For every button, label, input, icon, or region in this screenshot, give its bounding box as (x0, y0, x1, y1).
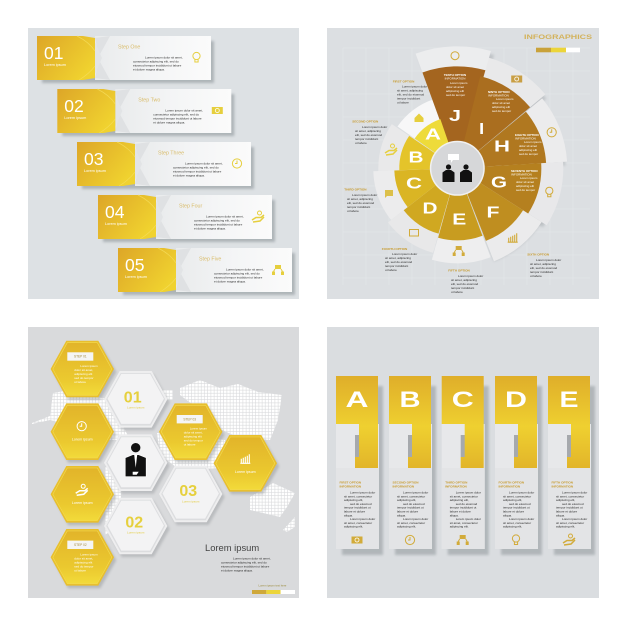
column E: Lorem ipsum dolor (562, 517, 587, 521)
column B: Lorem ipsum dolor (403, 490, 428, 494)
step card 04: 04 (105, 202, 125, 222)
sector letters: E (452, 212, 466, 228)
sector letters: H (494, 138, 510, 156)
sector captions: INFORMATION (488, 94, 509, 98)
outside captions: FOURTH OPTION (382, 247, 408, 251)
column E: E (560, 387, 578, 412)
hexagon: step 03: dolor sit amet, (184, 431, 203, 435)
sector captions: Lorem ipsum (450, 81, 468, 85)
outside captions: tempor incididunt (397, 96, 420, 100)
step card 05: eiusmod tempor incididunt ut labore (214, 276, 263, 280)
column D: sed do eiusmod (509, 502, 531, 506)
step card 03: Lorem ipsum (84, 169, 106, 173)
column A: tempor incididunt ut (344, 506, 371, 510)
column C: sed do eiusmod (456, 502, 478, 506)
column A (336, 376, 383, 555)
hexagon: 02 (104, 498, 170, 557)
outside captions: ut labore (530, 274, 542, 278)
outside captions: sit amet, adipiscing (347, 197, 373, 201)
column C: adipiscing elit, (450, 498, 469, 502)
sector letters: J (449, 108, 461, 125)
column A: Lorem ipsum dolor (350, 490, 375, 494)
outside captions: SECOND OPTION (352, 120, 379, 124)
column D: adipiscing elit, (503, 498, 522, 502)
column C: aliqua. (450, 513, 459, 517)
step card 04: consectetur adipiscing elit, sed do (194, 219, 240, 223)
sector captions: sed do tempor (519, 152, 538, 156)
outside captions: elit, sed do eiusmod (385, 260, 412, 264)
outside captions: sit amet, adipiscing (397, 88, 423, 92)
sector captions (444, 73, 542, 192)
column E: sit amet, consectetur (556, 521, 584, 525)
hexagon: step 01: sed do tempor (74, 376, 93, 380)
sector captions: EIGHTH OPTION (515, 133, 539, 137)
sector captions: sed do tempor (492, 109, 511, 113)
step card 05 (118, 248, 295, 295)
outside captions: elit, sed do eiusmod (451, 282, 478, 286)
step card 05: et dolore magna aliqua. (214, 280, 246, 284)
column C: tempor incididunt ut (450, 506, 476, 510)
step card 04: et dolore magna aliqua. (194, 227, 226, 231)
column D (495, 376, 542, 555)
dotted world map (32, 380, 295, 535)
column E: sed do eiusmod (562, 502, 584, 506)
step card 01: et dolore magna aliqua. (133, 68, 165, 72)
hexagon: step 03: STEP 03 (183, 417, 196, 421)
sector captions: NINTH OPTION (488, 90, 510, 94)
column E: aliqua. (556, 513, 565, 517)
panel: numbered steps (28, 28, 299, 299)
hexagon: step 03 (159, 403, 225, 463)
column D: aliqua. (503, 513, 512, 517)
column D: INFORMATION (498, 484, 521, 488)
step card 01: Lorem ipsum dolor sit amet, (145, 56, 183, 60)
hexagon: 02: 02 (125, 515, 143, 532)
outside captions: elit, sed do eiusmod (530, 266, 557, 270)
outside captions: ut labore (347, 209, 359, 213)
outside captions: ut labore (385, 268, 397, 272)
sector icons (385, 52, 556, 256)
column E: INFORMATION (552, 484, 574, 488)
column E: labore et dolore (556, 510, 577, 514)
hexagon: step 02: Lorem ipsum (80, 552, 98, 556)
step card 01: Step One (118, 44, 140, 50)
outside captions: sit amet, adipiscing (355, 129, 381, 133)
column D: Lorem ipsum dolor (509, 490, 534, 494)
column B: INFORMATION (392, 484, 415, 488)
hexagon: step 01: dolor sit amet, (74, 368, 93, 372)
column B (389, 376, 436, 555)
step card 01: eiusmod tempor incididunt ut labore (133, 64, 182, 68)
hexagon: step 02: STEP 02 (74, 543, 87, 547)
step card 04: Lorem ipsum dolor sit amet, (206, 215, 244, 219)
centre circle with two people (430, 141, 485, 196)
column E (548, 376, 595, 555)
outside captions: elit, sed do eiusmod (397, 92, 424, 96)
hexagon: step 02: dolor sit amet, (74, 556, 93, 560)
outside captions: tempor incididunt (451, 286, 474, 290)
outside captions: FIRST OPTION (393, 80, 415, 84)
hexagon: step 01: STEP 01 (74, 355, 87, 359)
column A: adipiscing elit. (344, 525, 363, 529)
outside captions: ut labore (355, 141, 367, 145)
outside captions: Lorem ipsum dolor (402, 84, 427, 88)
sector captions: Lorem ipsum (496, 97, 514, 101)
step card 04: eiusmod tempor incididunt ut labore (194, 223, 243, 227)
sector letters: F (486, 204, 500, 222)
column C: sit amet, consectetur (450, 494, 478, 498)
step card 02: eiusmod tempor incididunt ut labore (153, 117, 202, 121)
legend bar: Lorem ipsum text here (258, 584, 287, 588)
column A: FIRST OPTION (340, 480, 362, 484)
sector captions: TENTH OPTION (444, 73, 466, 77)
column E: Lorem ipsum dolor (562, 490, 587, 494)
step card 05: Lorem ipsum dolor sit amet, (226, 268, 264, 272)
heading: infographics: INFOGRAPHICS (524, 34, 592, 41)
step card 05: consectetur adipiscing elit, sed do (214, 272, 260, 276)
outside captions: elit, sed do eiusmod (347, 201, 374, 205)
step card 04 (98, 195, 275, 242)
column C: adipiscing elit. (450, 525, 469, 529)
column B: sed do eiusmod (403, 502, 425, 506)
hexagon: 03: Lorem ipsum (182, 500, 200, 504)
panel: A to E columns (327, 327, 599, 598)
sector captions: dolor sit amet (446, 85, 464, 89)
hexagon: 03: 03 (179, 483, 197, 500)
hexagon: clock: Lorem ipsum (72, 438, 93, 442)
hexagon: chart: Lorem ipsum (235, 470, 256, 474)
hexagon: 02: Lorem ipsum (127, 530, 145, 534)
step card 01: consectetur adipiscing elit, sed do (133, 60, 179, 64)
outside captions: sit amet, adipiscing (385, 256, 411, 260)
step card 03: Step Three (158, 150, 184, 156)
step card 02: 02 (64, 96, 84, 116)
hexagon: step 03: ut labore (184, 443, 196, 447)
sector letters: C (406, 176, 422, 192)
hexagon: clock (51, 403, 116, 463)
outside captions: Lorem ipsum dolor (362, 125, 387, 129)
outside captions: sit amet, adipiscing (451, 278, 477, 282)
outside captions: Lorem ipsum dolor (536, 258, 561, 262)
step card 02 (57, 89, 234, 136)
step card 04: Step Four (179, 204, 202, 210)
sector captions: INFORMATION (445, 76, 465, 80)
outside captions: tempor incididunt (347, 205, 370, 209)
hexagon: step 03: sed do tempor (184, 439, 203, 443)
sector captions: Lorem ipsum (524, 140, 542, 144)
hexagon: 01 (104, 371, 170, 430)
hexagon: step 03: Lorem ipsum (190, 427, 208, 431)
column B: Lorem ipsum dolor (403, 517, 428, 521)
column A: adipiscing elit, (344, 498, 363, 502)
column D: Lorem ipsum dolor (509, 517, 534, 521)
heading: infographics (524, 34, 592, 52)
sector captions: Lorem ipsum (520, 176, 538, 180)
hexagon: hand: Lorem ipsum (72, 501, 93, 505)
outside captions: tempor incididunt (530, 270, 553, 274)
column A: Lorem ipsum dolor (350, 517, 375, 521)
step card 03: et dolore magna aliqua. (173, 174, 205, 178)
sector captions: sed do tempor (446, 93, 465, 97)
column B: sit amet, consectetur (397, 494, 425, 498)
column A: A (346, 387, 369, 412)
step card 02: Step Two (138, 98, 160, 104)
sector captions: dolor sit amet (492, 101, 510, 105)
sector letters: A (425, 126, 441, 144)
step card 03: consectetur adipiscing elit, sed do (173, 166, 219, 170)
step card 05: Lorem ipsum (125, 275, 147, 279)
wheel chart (369, 45, 572, 265)
hexagon: step 01: Lorem ipsum (80, 364, 98, 368)
text block: lorem ipsum: Lorem ipsum dolor sit amet, (233, 556, 271, 560)
column B: labore et dolore (397, 510, 418, 514)
outside captions: ut labore (451, 290, 463, 294)
hexagon: person (104, 434, 170, 494)
outside captions: ut labore (397, 100, 409, 104)
panel: circular wheel (327, 28, 599, 299)
text block: lorem ipsum: consectetur adipiscing elit, sed do (221, 560, 267, 564)
text block: lorem ipsum: Lorem ipsum (205, 542, 259, 553)
column B: SECOND OPTION (392, 480, 419, 484)
step card 02: Lorem ipsum dolor sit amet, (165, 109, 203, 113)
column C: INFORMATION (445, 484, 468, 488)
outside captions (344, 80, 561, 294)
column C: C (452, 387, 474, 412)
sector captions: INFORMATION (515, 136, 536, 140)
sector captions: adipiscing elit (492, 105, 510, 109)
step card 04: Lorem ipsum (105, 222, 127, 226)
hexagon: step 03: adipiscing elit (184, 435, 202, 439)
column D: D (505, 387, 527, 412)
outer white band (369, 45, 572, 265)
column E: FIFTH OPTION (552, 480, 574, 484)
outside captions: THIRD OPTION (344, 188, 367, 192)
outside captions: tempor incididunt (385, 264, 408, 268)
step card 02: Lorem ipsum (64, 116, 86, 120)
step card 01: Lorem ipsum (44, 63, 66, 67)
hexagon: step 01: adipiscing elit (74, 372, 92, 376)
column B: adipiscing elit. (397, 525, 416, 529)
hexagon: step 02: sed do tempor (74, 564, 93, 568)
sector captions: adipiscing elit (516, 184, 534, 188)
sector letters: B (408, 150, 424, 166)
hexagon: hand (51, 466, 116, 525)
column D: tempor incididunt ut (503, 506, 530, 510)
column D: FOURTH OPTION (498, 480, 525, 484)
sector captions: sed do tempor (516, 188, 535, 192)
column D: sit amet, consectetur (503, 521, 531, 525)
sector captions: adipiscing elit (519, 148, 537, 152)
legend bar (252, 584, 295, 594)
sector letters: G (491, 174, 507, 192)
outside captions: tempor incididunt (355, 137, 378, 141)
step card 03: eiusmod tempor incididunt ut labore (173, 170, 222, 174)
column C (442, 376, 489, 555)
column E: adipiscing elit, (556, 498, 575, 502)
hexagon: 01: 01 (124, 390, 142, 407)
sector captions: SEVENTH OPTION (511, 169, 538, 173)
step card 01 (37, 36, 214, 83)
column C: THIRD OPTION (445, 480, 468, 484)
column C: Lorem ipsum dolor (456, 517, 481, 521)
sector captions: adipiscing elit (446, 89, 464, 93)
column C: sit amet, consectetur (450, 521, 478, 525)
hexagon: step 02 (51, 529, 116, 588)
sector letters (406, 108, 510, 228)
outside captions: Lorem ipsum dolor (392, 252, 417, 256)
column B: B (400, 387, 420, 412)
hexagon: step 01 (51, 341, 116, 400)
outside captions: Lorem ipsum dolor (352, 193, 377, 197)
hexagon: step 02: ut labore (74, 568, 86, 572)
step card 03 (77, 142, 254, 189)
step card 05: 05 (125, 255, 144, 275)
column A: sit amet, consectetur (344, 521, 372, 525)
column E: tempor incididunt ut (556, 506, 583, 510)
hexagon: 01: Lorem ipsum (127, 405, 145, 409)
outside captions: Lorem ipsum dolor (458, 274, 483, 278)
column D: sit amet, consectetur (503, 494, 531, 498)
column E: sit amet, consectetur (556, 494, 584, 498)
panel: hexagons (28, 327, 299, 598)
step card 05: Step Five (199, 256, 221, 262)
column D: labore et dolore (503, 510, 524, 514)
column C: labore et dolore (450, 510, 471, 514)
sector captions: dolor sit amet (519, 144, 537, 148)
text block: lorem ipsum: eiusmod tempor incididunt ut labore (221, 564, 270, 568)
column A: INFORMATION (340, 484, 362, 488)
hexagon: 03 (159, 466, 225, 525)
column A: aliqua. (344, 513, 353, 517)
column B: tempor incididunt ut (397, 506, 424, 510)
text block: lorem ipsum: et dolore magna aliqua. (221, 568, 253, 572)
sector letters: D (422, 200, 438, 218)
sector captions: dolor sit amet (516, 180, 534, 184)
step card 02: consectetur adipiscing elit, sed do (153, 113, 199, 117)
step card 01: 01 (44, 43, 63, 63)
column D: adipiscing elit. (503, 525, 522, 529)
hexagon: chart (214, 435, 279, 494)
column E: adipiscing elit. (556, 525, 575, 529)
hexagon: step 01: ut labore (74, 380, 86, 384)
column B: sit amet, consectetur (397, 521, 425, 525)
text block: lorem ipsum (205, 542, 271, 572)
step card 03: Lorem ipsum dolor sit amet, (185, 162, 223, 166)
outside captions: FIFTH OPTION (448, 268, 471, 272)
sector letters: I (479, 121, 484, 138)
step card 03: 03 (84, 149, 103, 169)
hexagon: step 02: adipiscing elit (74, 560, 92, 564)
outside captions: elit, sed do eiusmod (355, 133, 382, 137)
sector captions: INFORMATION (511, 172, 532, 176)
outside captions: sit amet, adipiscing (530, 262, 556, 266)
outside captions: SIXTH OPTION (527, 252, 550, 256)
column A: sed do eiusmod (350, 502, 372, 506)
step card 02: et dolore magna aliqua. (153, 121, 185, 125)
column A: sit amet, consectetur (344, 494, 372, 498)
coloured sectors (391, 65, 550, 244)
column C: Lorem ipsum dolor (456, 490, 481, 494)
column B: adipiscing elit, (397, 498, 416, 502)
column B: aliqua. (397, 513, 406, 517)
column A: labore et dolore (344, 510, 365, 514)
